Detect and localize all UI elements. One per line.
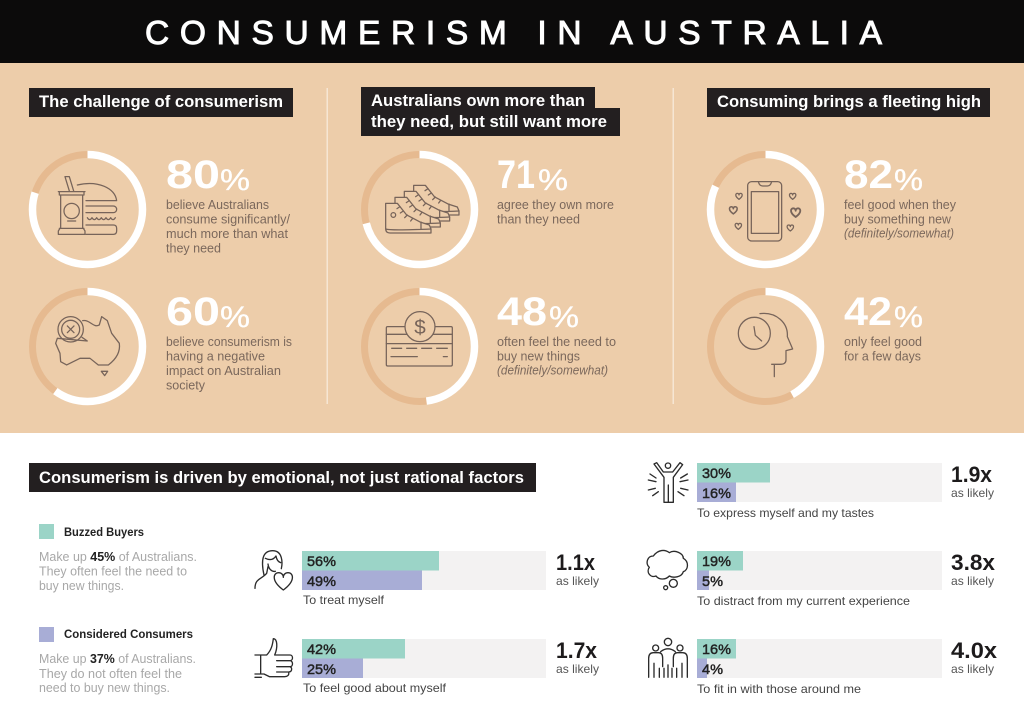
heading: emotional factors xyxy=(29,463,536,492)
multiplier: 4.0x: as likely xyxy=(951,662,994,676)
bar chart: distract xyxy=(697,551,942,590)
icon: woman with heart xyxy=(255,551,292,590)
stat: 71 percent: agree they own more xyxy=(497,198,614,212)
stat: 42 percent: for a few days xyxy=(844,350,921,364)
stat: 82 percent: 82 xyxy=(844,153,893,197)
stat: 60 percent: believe consumerism is xyxy=(166,335,292,349)
row: to treat myself xyxy=(255,550,599,607)
bar chart: distract: 5% xyxy=(702,573,723,589)
ring: 71 percent xyxy=(364,154,474,264)
icon: person with raised arms xyxy=(648,463,688,502)
stat: 48 percent: often feel the need to xyxy=(497,335,616,349)
stat: 80 percent: much more than what xyxy=(166,227,289,241)
row: to express myself xyxy=(648,462,994,520)
stat: 82 percent xyxy=(844,153,957,240)
bar chart: feel good: 25% xyxy=(307,661,336,677)
stat: 82 percent: % xyxy=(894,164,923,197)
heading: own more than they need: Australians own more than xyxy=(371,92,585,110)
legend: considered consumers: need to buy new things. xyxy=(39,681,170,695)
stat: 42 percent: only feel good xyxy=(844,335,922,349)
label: treat myself: To treat myself xyxy=(303,593,385,607)
stat: 71 percent: than they need xyxy=(497,212,580,226)
multiplier: 1.7x xyxy=(556,638,599,676)
stat: 80 percent: % xyxy=(220,164,250,197)
multiplier: 1.1x: as likely xyxy=(556,574,599,588)
stat: 82 percent: feel good when they xyxy=(844,198,957,212)
stat: 80 percent: they need xyxy=(166,242,221,256)
multiplier: 3.8x: 3.8x xyxy=(951,550,996,575)
stat: 60 percent: having a negative xyxy=(166,350,265,364)
stat: 48 percent: % xyxy=(549,301,579,334)
icon: phone with hearts xyxy=(729,182,800,241)
stat: 60 percent: impact on Australian xyxy=(166,364,281,378)
stat: 71 percent xyxy=(497,153,614,226)
multiplier: 4.0x xyxy=(951,638,998,676)
peach statistics panel xyxy=(0,63,1024,433)
bar chart: express myself xyxy=(697,463,942,502)
icon: thumbs up xyxy=(255,639,292,677)
title: CONSUMERISM IN AUSTRALIA xyxy=(145,15,883,52)
heading: emotional factors: Consumerism is driven by emotional, not just rational factors xyxy=(39,469,524,487)
icon: credit card with dollar coin: $ xyxy=(414,316,426,339)
multiplier: 3.8x xyxy=(951,550,996,588)
bar chart: feel good xyxy=(302,639,546,678)
bar chart: distract: 19% xyxy=(702,553,731,569)
icon: drink and burger xyxy=(58,177,117,234)
bar chart: treat myself: 49% xyxy=(307,573,336,589)
label: feel good: To feel good about myself xyxy=(303,681,447,695)
legend: buzzed buyers: Buzzed Buyers xyxy=(64,527,144,539)
stat: 80 percent: 80 xyxy=(166,153,220,197)
stat: 48 percent: (definitely/somewhat) xyxy=(497,364,608,378)
ring: 48 percent xyxy=(364,292,474,402)
icon: group of three people xyxy=(649,638,687,677)
column: consuming brings a fleeting high xyxy=(707,88,990,402)
stat: 80 percent: consume significantly/ xyxy=(166,212,291,226)
stat: 42 percent xyxy=(844,290,923,364)
heading: own more than they need: they need, but still want more xyxy=(371,113,607,131)
icon: credit card with dollar coin xyxy=(386,312,452,366)
legend: considered consumers: Make up 37% of Australians. xyxy=(39,652,196,666)
icon: thought cloud xyxy=(647,550,687,590)
bar chart: treat myself xyxy=(302,551,546,590)
column: own more than they need xyxy=(361,87,620,402)
stat: 80 percent: believe Australians xyxy=(166,198,269,212)
ring: 60 percent xyxy=(32,292,142,402)
bar chart: fit in: 4% xyxy=(702,661,723,677)
label: express myself: To express myself and my tastes xyxy=(697,506,874,520)
legend: buzzed buyers xyxy=(39,524,197,593)
stat: 48 percent xyxy=(497,290,616,378)
stat: 48 percent: buy new things xyxy=(497,350,580,364)
stat: 82 percent: buy something new xyxy=(844,212,952,226)
multiplier: 3.8x: as likely xyxy=(951,574,994,588)
header band xyxy=(0,0,1024,63)
stat: 71 percent: % xyxy=(538,164,568,197)
row: to fit in xyxy=(649,638,998,696)
icon: head with clock xyxy=(738,313,793,377)
stat: 60 percent: % xyxy=(220,301,250,334)
ring: 82 percent xyxy=(710,154,820,264)
multiplier: 1.7x: as likely xyxy=(556,662,599,676)
stat: 60 percent: society xyxy=(166,378,206,392)
label: distract: To distract from my current experience xyxy=(697,594,910,608)
bar chart: treat myself: 56% xyxy=(307,553,336,569)
stat: 80 percent xyxy=(166,153,291,256)
stat: 60 percent xyxy=(166,290,292,392)
bar chart: fit in xyxy=(697,639,942,678)
multiplier: 1.9x: as likely xyxy=(951,486,994,500)
bar chart: express myself: 16% xyxy=(702,485,731,501)
legend: considered consumers: Considered Consumers xyxy=(64,629,193,641)
legend: considered consumers xyxy=(39,627,196,695)
stat: 42 percent: % xyxy=(894,301,923,334)
column: the challenge of consumerism xyxy=(29,88,293,402)
label: fit in: To fit in with those around me xyxy=(697,682,861,696)
icon: stacked sneakers xyxy=(386,185,459,233)
row: to feel good about myself xyxy=(255,638,599,695)
ring: 42 percent xyxy=(710,292,820,402)
heading: consuming brings a fleeting high: Consuming brings a fleeting high xyxy=(717,93,981,111)
bar chart: fit in: 16% xyxy=(702,641,731,657)
bar chart: express myself: 30% xyxy=(702,465,731,481)
stat: 42 percent: 42 xyxy=(844,290,892,334)
bar chart: feel good: 42% xyxy=(307,641,336,657)
legend: buzzed buyers: buy new things. xyxy=(39,579,124,593)
heading: the challenge of consumerism: The challenge of consumerism xyxy=(39,93,283,111)
multiplier: 1.7x: 1.7x xyxy=(556,638,598,663)
heading: the challenge of consumerism xyxy=(29,88,293,117)
icon: australia map with cross xyxy=(56,317,120,376)
ring: 80 percent xyxy=(32,154,142,264)
multiplier: 1.9x: 1.9x xyxy=(951,462,993,487)
heading: consuming brings a fleeting high xyxy=(707,88,990,117)
multiplier: 4.0x: 4.0x xyxy=(951,638,998,663)
multiplier: 1.1x xyxy=(556,550,599,588)
multiplier: 1.9x xyxy=(951,462,994,500)
multiplier: 1.1x: 1.1x xyxy=(556,550,596,575)
legend: considered consumers: They do not often feel the xyxy=(39,667,182,681)
stat: 48 percent: 48 xyxy=(497,290,547,334)
legend: buzzed buyers: Make up 45% of Australians. xyxy=(39,550,197,564)
row: to distract xyxy=(647,550,996,608)
heading: own more than they need xyxy=(361,87,620,136)
legend: buzzed buyers: They often feel the need to xyxy=(39,564,187,578)
stat: 71 percent: 71 xyxy=(497,153,535,197)
stat: 60 percent: 60 xyxy=(166,290,220,334)
stat: 82 percent: (definitely/somewhat) xyxy=(844,226,954,240)
